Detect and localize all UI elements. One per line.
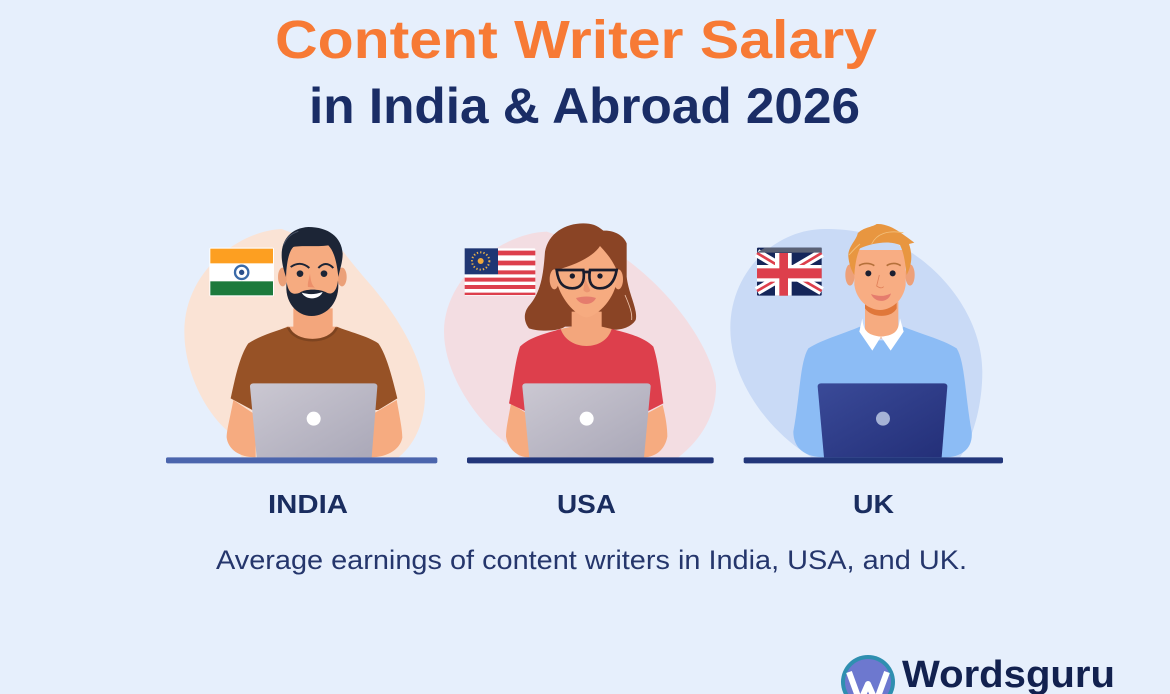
panel: India	[166, 227, 437, 463]
head: USA woman	[550, 246, 623, 317]
desk: USA	[467, 457, 714, 463]
panel: USA	[444, 223, 716, 463]
laptop	[522, 383, 651, 457]
infographic canvas	[166, 19, 1112, 694]
person: India man	[227, 227, 402, 457]
caption: Average earnings of content writers in India, USA, and UK.	[216, 545, 967, 575]
flag: India	[209, 248, 274, 296]
label: India: INDIA	[268, 489, 348, 519]
desk: India	[166, 457, 437, 463]
person: UK man	[793, 224, 972, 457]
flag: UK	[757, 248, 822, 296]
laptop	[250, 383, 377, 457]
head: UK man	[845, 224, 915, 316]
title line 1: Content Writer Salary	[275, 10, 877, 70]
logo: Wordsguru	[841, 654, 1115, 694]
title line 2: in India & Abroad 2026	[309, 78, 860, 134]
flag: USA	[465, 248, 535, 296]
head: India man	[278, 227, 347, 316]
background blob: India	[184, 229, 425, 457]
laptop	[818, 383, 947, 457]
panel: UK	[730, 224, 1003, 463]
hair back	[525, 223, 636, 331]
desk: UK	[744, 457, 1003, 463]
background blob: UK	[730, 229, 982, 457]
background blob: USA	[444, 232, 716, 457]
label: UK: UK	[853, 489, 894, 519]
logo icon	[841, 655, 895, 694]
person: USA woman	[506, 223, 667, 457]
label: USA: USA	[557, 489, 616, 519]
